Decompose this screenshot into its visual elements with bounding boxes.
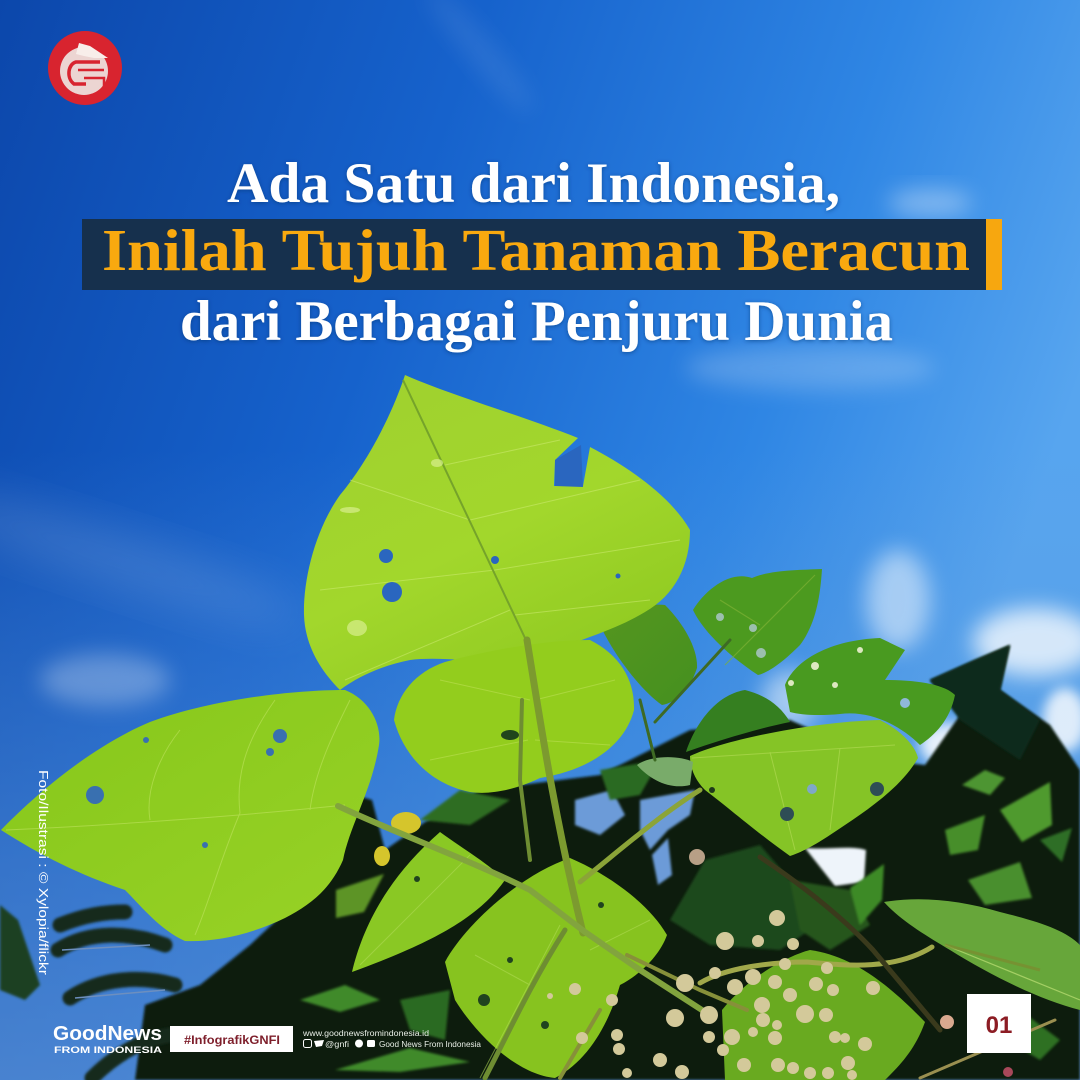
page number bbox=[967, 994, 1031, 1053]
photo credit: Foto/Ilustrasi : © Xylopia/flickr bbox=[36, 770, 50, 975]
title line 3: dari Berbagai Penjuru Dunia bbox=[180, 290, 893, 353]
page number: 01 bbox=[986, 1012, 1012, 1039]
plant stems bbox=[338, 640, 1055, 1078]
brand: GoodNews from Indonesia: GoodNews bbox=[53, 1023, 162, 1045]
leaf: small behind centre bbox=[598, 605, 697, 705]
background: clouds bbox=[0, 0, 1080, 767]
leaf: small folded at centre bbox=[637, 757, 693, 786]
leaf: bottom flower backdrop bbox=[722, 950, 925, 1080]
title line 2: Inilah Tujuh Tanaman Beracun bbox=[102, 217, 970, 283]
leaf: right bbox=[690, 720, 918, 856]
logo: GNFI red circle emblem bbox=[48, 31, 122, 105]
leaf: bottom right bbox=[884, 899, 1080, 1010]
website and social handles: @gnfi bbox=[325, 1040, 349, 1049]
leaf: small yellow buds bbox=[374, 812, 421, 866]
background: palm fronds bbox=[58, 912, 175, 1078]
website and social handles bbox=[302, 1029, 482, 1049]
hashtag label: #InfografikGNFI bbox=[184, 1033, 280, 1047]
leaf: small lower left bbox=[352, 832, 505, 972]
title highlight band bbox=[82, 217, 1002, 290]
background: left tree bbox=[0, 905, 40, 1000]
background: dark tree foliage bbox=[0, 645, 1080, 1080]
leaf: mid right dim bbox=[686, 690, 790, 752]
flower buds bbox=[547, 849, 1013, 1080]
hashtag label bbox=[170, 1026, 293, 1052]
leaf: small upper right bbox=[693, 569, 822, 675]
leaf: lower centre bbox=[445, 858, 667, 1078]
leaf: large left bbox=[1, 690, 379, 941]
sky window: white cloud pocket bbox=[805, 848, 866, 886]
brand: GoodNews from Indonesia bbox=[53, 1023, 162, 1056]
title line 1: Ada Satu dari Indonesia, bbox=[227, 152, 840, 215]
leaf: lower middle round bbox=[394, 640, 634, 793]
leaf: big top bbox=[304, 375, 690, 690]
brand: GoodNews from Indonesia: FROM INDONESIA bbox=[54, 1045, 162, 1056]
leaf: small cluster right bbox=[785, 638, 955, 745]
background: dark leaves and green patches bbox=[300, 760, 1072, 1072]
website and social handles: www.goodnewsfromindonesia.id bbox=[302, 1029, 429, 1038]
sky window: lower centre fragments bbox=[575, 790, 695, 885]
background: palm top right bbox=[930, 645, 1040, 760]
website and social handles: Good News From Indonesia bbox=[379, 1040, 482, 1049]
plant leaves bbox=[1, 375, 1080, 1080]
